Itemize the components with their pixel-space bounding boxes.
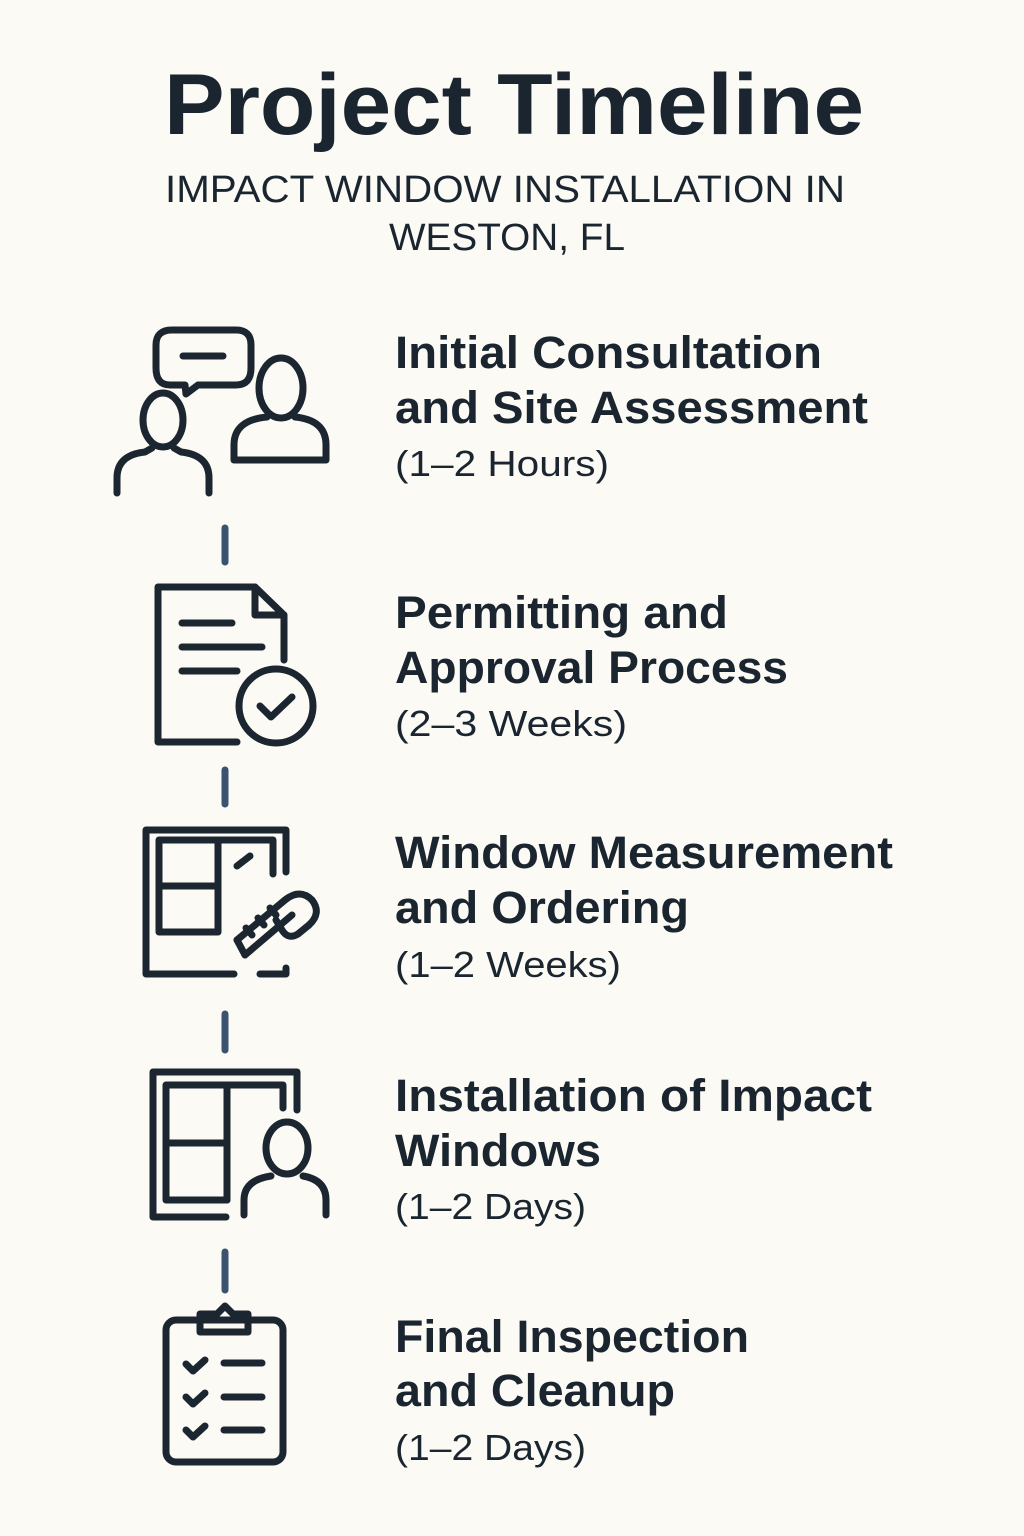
- icon: window measurement: [146, 830, 316, 974]
- subtitle: WESTON, FL: [389, 217, 625, 259]
- icon: consultation: [117, 330, 326, 493]
- icon: document approval: [158, 587, 313, 743]
- icon: installation: [153, 1072, 326, 1217]
- connector 4: [222, 1252, 228, 1290]
- subtitle: IMPACT WINDOW INSTALLATION IN: [165, 169, 845, 211]
- step 5 text: and Cleanup: [395, 1365, 675, 1416]
- step 4 text: Installation of Impact: [395, 1070, 872, 1121]
- step 4 text: Windows: [395, 1125, 601, 1176]
- step 1 text: (1–2 Hours): [395, 443, 609, 484]
- step 2 text: [395, 587, 788, 744]
- step 3 text: [395, 827, 893, 985]
- step 2 text: (2–3 Weeks): [395, 703, 627, 744]
- step 1 text: Initial Consultation: [395, 327, 822, 378]
- title: Project Timeline: [164, 57, 864, 153]
- step 3 text: and Ordering: [395, 882, 689, 933]
- step 1 text: and Site Assessment: [395, 382, 868, 433]
- connector 1: [222, 528, 228, 562]
- step 1 text: [395, 327, 868, 484]
- connector 3: [222, 1014, 228, 1050]
- step 2 text: Approval Process: [395, 642, 788, 693]
- step 5 text: (1–2 Days): [395, 1427, 586, 1468]
- step 5 text: Final Inspection: [395, 1311, 749, 1362]
- step 4 text: (1–2 Days): [395, 1186, 586, 1227]
- step 4 text: [395, 1070, 872, 1227]
- icon: clipboard checklist: [166, 1306, 283, 1462]
- subtitle: [165, 169, 845, 259]
- step 5 text: [395, 1311, 749, 1468]
- step 3 text: Window Measurement: [395, 827, 893, 878]
- connector 2: [222, 770, 228, 804]
- step 3 text: (1–2 Weeks): [395, 944, 621, 985]
- step 2 text: Permitting and: [395, 587, 728, 638]
